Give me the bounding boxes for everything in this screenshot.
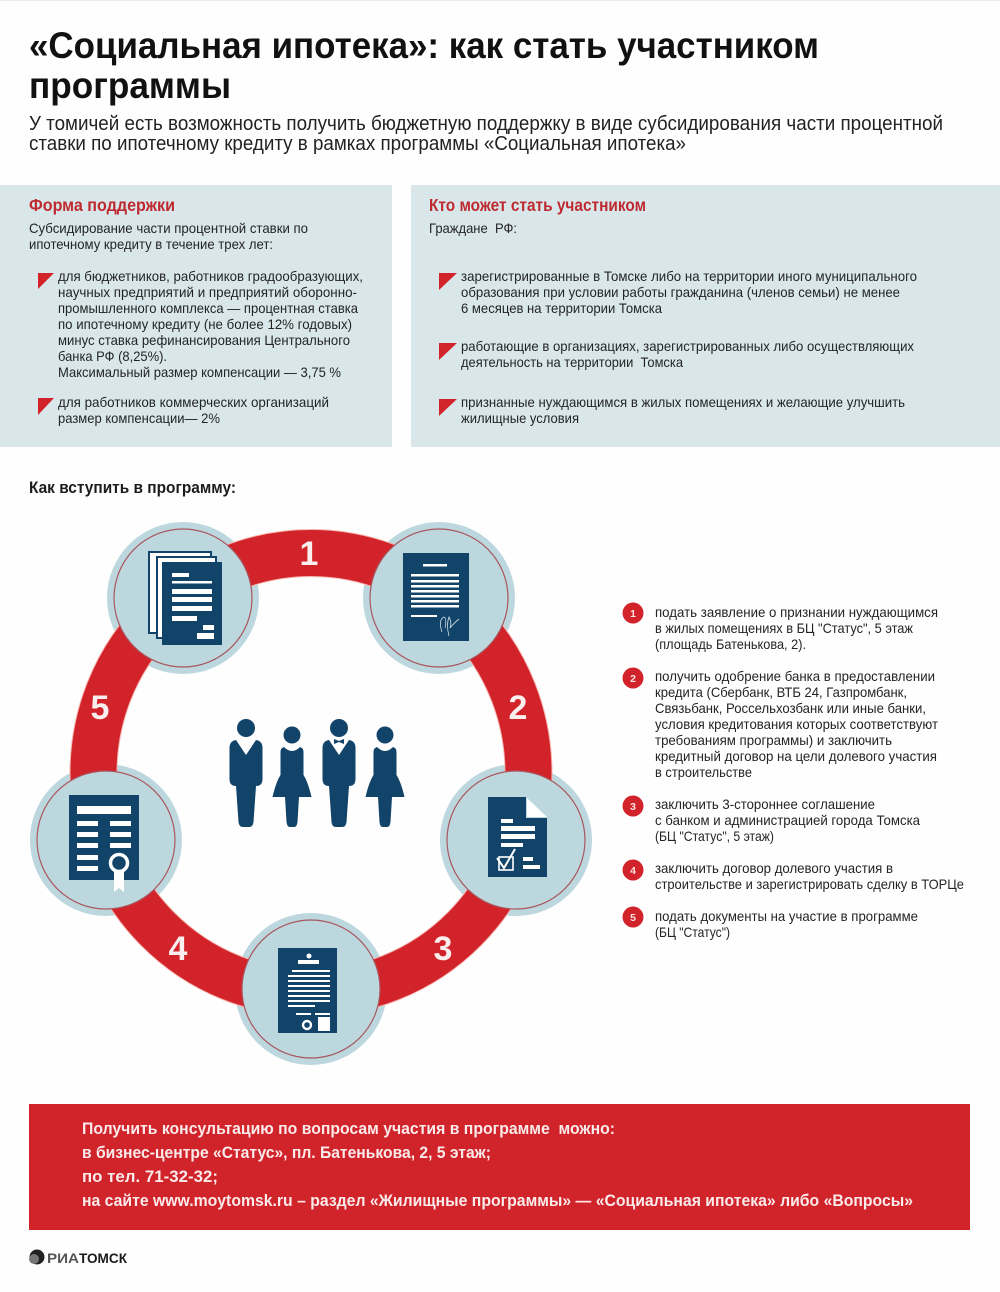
participant item one: 6 месяцев на территории Томска [461, 300, 662, 316]
step 2: Связьбанк, Россельхозбанк или иные банки, [655, 700, 926, 716]
step 5: подать документы на участие в программе [655, 908, 918, 924]
inner discs [37, 529, 585, 1058]
consultation banner: на сайте www.moytomsk.ru – раздел «Жилищные программы» — «Социальная ипотека» либо «Вопросы» [82, 1191, 913, 1210]
step 2: 2 [630, 673, 636, 685]
participant item three [461, 394, 905, 426]
support item one: банка РФ (8,25%). [58, 348, 167, 364]
step 4: строительстве и зарегистрировать сделку в ТОРЦе [655, 876, 964, 892]
participant item two: работающие в организациях, зарегистрированных либо осуществляющих [461, 338, 914, 354]
support intro text: Субсидирование части процентной ставки по [29, 220, 308, 236]
cycle diagram [30, 522, 592, 1065]
heading: who can participate: Кто может стать участником [429, 195, 646, 215]
support intro text: ипотечному кредиту в течение трех лет: [29, 236, 273, 252]
support item two: для работников коммерческих организаций [58, 394, 329, 410]
step 1: подать заявление о признании нуждающимся [655, 604, 938, 620]
participant item one: зарегистрированные в Томске либо на территории иного муниципального [461, 268, 917, 284]
step 4 [622, 860, 964, 892]
bullet marker [38, 273, 54, 289]
support item one [58, 268, 363, 380]
step 3: 3 [630, 801, 636, 813]
woman figure [272, 726, 312, 827]
step 2: условия кредитования которых соответствуют [655, 716, 939, 732]
ring numbers: 5 [91, 689, 109, 727]
bullet marker [439, 273, 457, 290]
man figure with bow tie [322, 719, 356, 827]
step 1: в жилых помещениях в БЦ "Статус", 5 этаж [655, 620, 914, 636]
support item one: промышленного комплекса — процентная ставка [58, 300, 358, 316]
panel: who can participate [411, 185, 1000, 447]
step 3: заключить 3-стороннее соглашение [655, 796, 875, 812]
step 1: 1 [630, 608, 636, 620]
steps list [622, 602, 964, 940]
support intro text [29, 220, 308, 252]
subtitle: ставки по ипотечному кредиту в рамках программы «Социальная ипотека» [29, 133, 686, 155]
participant item two [461, 338, 914, 370]
participant item three: жилищные условия [461, 410, 579, 426]
participant item three: признанные нуждающимся в жилых помещениях и желающие улучшить [461, 394, 905, 410]
icon: document with checkbox [488, 797, 547, 877]
support item one: Максимальный размер компенсации — 3,75 % [58, 364, 341, 380]
ring numbers: 4 [169, 930, 188, 968]
icon: agreement document [278, 948, 337, 1033]
icon: stacked documents [149, 552, 222, 645]
support item two [58, 394, 329, 426]
step 3 [622, 796, 920, 844]
ring numbers [91, 535, 527, 968]
title: «Социальная ипотека»: как стать участником [29, 25, 819, 66]
step 5: 5 [630, 912, 636, 924]
consultation banner [29, 1104, 970, 1230]
participant item one [461, 268, 917, 316]
red ring [94, 553, 528, 993]
bullet marker [439, 399, 457, 416]
support item one: для бюджетников, работников градообразующих, [58, 268, 363, 284]
woman figure [366, 726, 404, 827]
support item two: размер компенсации— 2% [58, 410, 220, 426]
support item one: по ипотечному кредиту (не более 12% годовых) [58, 316, 352, 332]
consultation banner: в бизнес-центре «Статус», пл. Батенькова, 2, 5 этаж; [82, 1143, 491, 1162]
ring numbers: 2 [509, 689, 527, 727]
step 2: кредитный договор на цели долевого участия [655, 748, 937, 764]
heading: support form: Форма поддержки [29, 195, 175, 215]
consultation banner: по тел. 71-32-32; [82, 1167, 218, 1186]
bullet marker [439, 343, 457, 360]
bullet marker [38, 398, 54, 415]
ring numbers: 1 [300, 535, 318, 573]
logo: РИА [47, 1250, 79, 1266]
support item one: научных предприятий и предприятий оборонно- [58, 284, 357, 300]
citizens label: Граждане РФ: [429, 220, 517, 236]
step 2: требованиям программы) и заключить [655, 732, 892, 748]
step 2 [622, 668, 939, 780]
step 1 [622, 602, 938, 652]
logo: ТОМСК [79, 1250, 127, 1266]
step 2: кредита (Сбербанк, ВТБ 24, Газпромбанк, [655, 684, 907, 700]
step 5 [622, 906, 918, 940]
panel: support form [0, 185, 392, 447]
step 4: 4 [630, 865, 636, 877]
participant item one: образования при условии работы гражданина (членов семьи) не менее [461, 284, 900, 300]
step 2: получить одобрение банка в предоставлении [655, 668, 935, 684]
subtitle [29, 113, 943, 155]
step 3: с банком и администрацией города Томска [655, 812, 920, 828]
step 2: в строительстве [655, 764, 752, 780]
support item one: минус ставка рефинансирования Центрального [58, 332, 350, 348]
outer discs [30, 522, 592, 1065]
logo [29, 1250, 127, 1266]
step 1: (площадь Батенькова, 2). [655, 636, 806, 652]
ring numbers: 3 [434, 930, 452, 968]
step 3: (БЦ "Статус", 5 этаж) [655, 828, 774, 844]
icon: certificate [69, 795, 139, 892]
icon: people group [230, 719, 404, 827]
man figure [230, 719, 262, 827]
subtitle: У томичей есть возможность получить бюджетную поддержку в виде субсидирования части процентной [29, 113, 943, 135]
step 5: (БЦ "Статус") [655, 924, 730, 940]
heading: how to join: Как вступить в программу: [29, 478, 236, 497]
participant item two: деятельность на территории Томска [461, 354, 683, 370]
step 4: заключить договор долевого участия в [655, 860, 893, 876]
title [29, 25, 819, 106]
consultation banner: Получить консультацию по вопросам участия в программе можно: [82, 1119, 615, 1138]
title: программы [29, 65, 231, 106]
icon: signed document [403, 553, 469, 641]
